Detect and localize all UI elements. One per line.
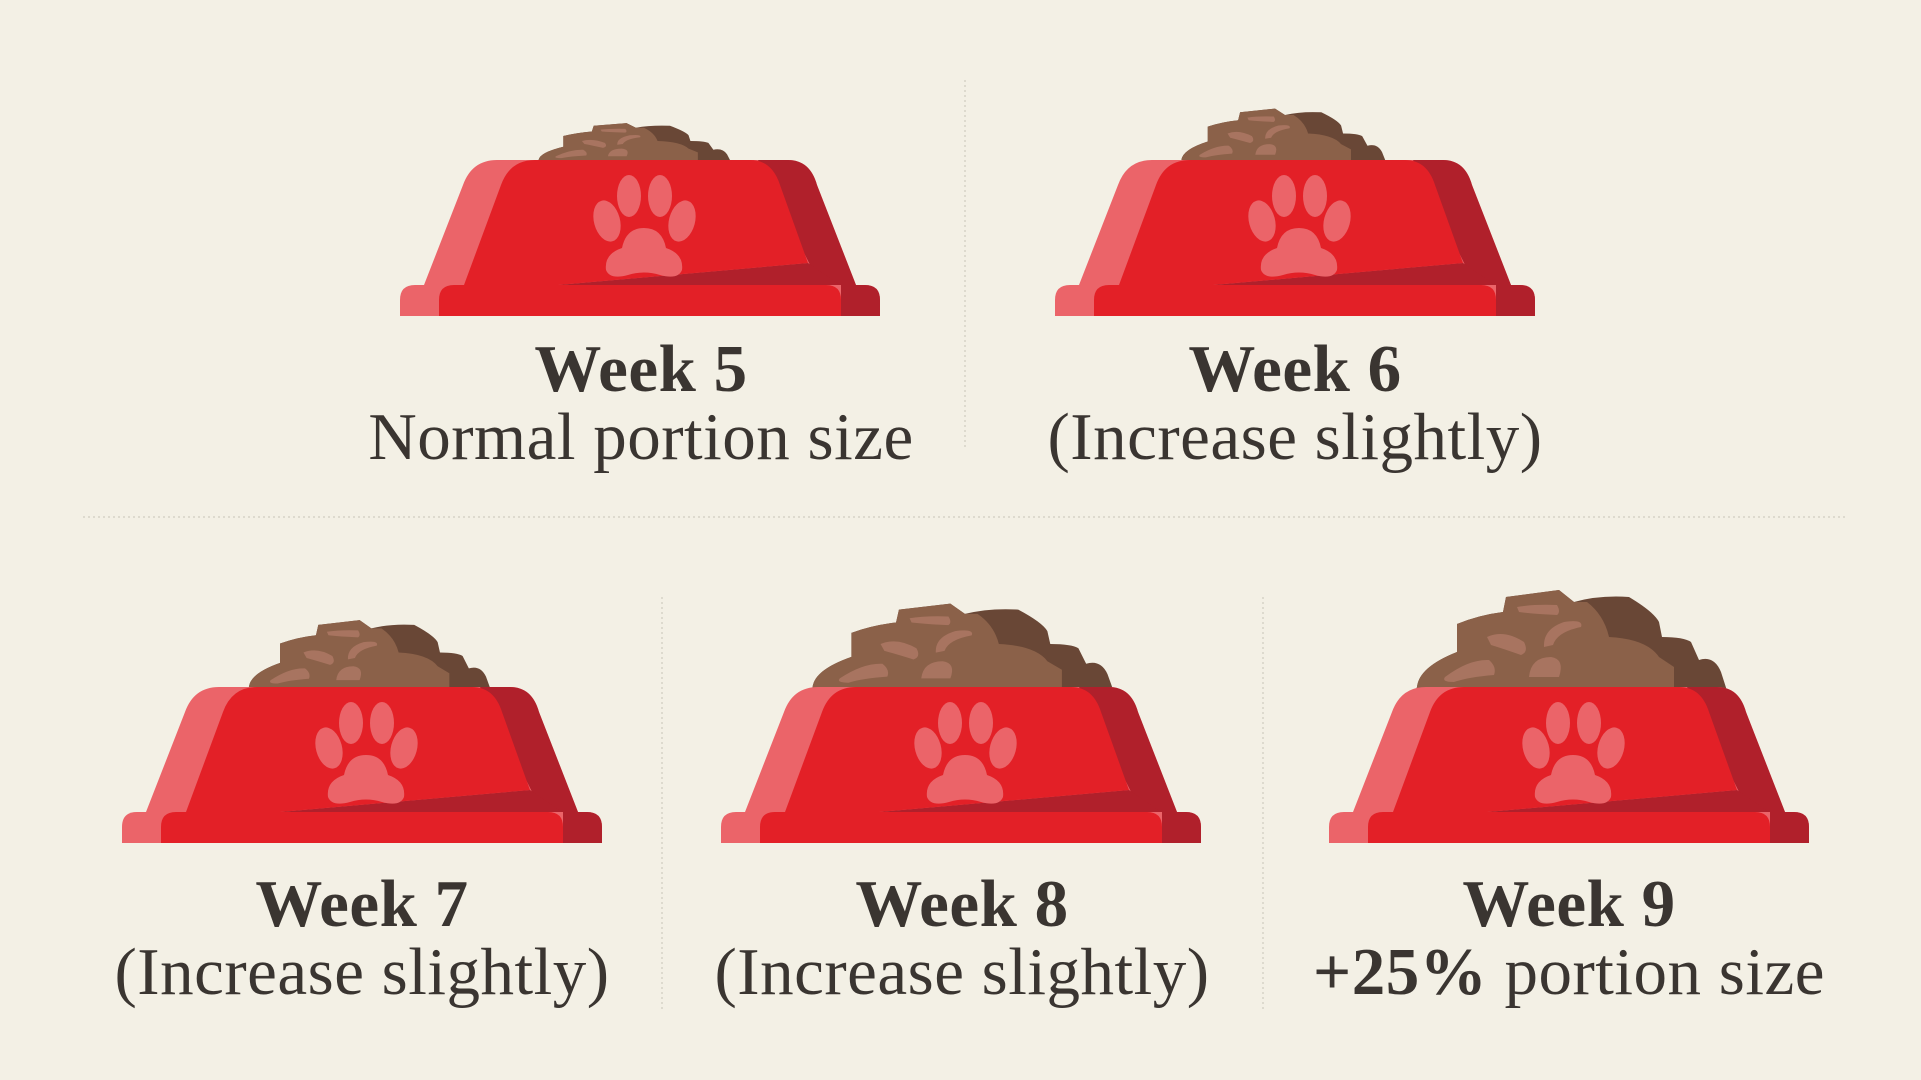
label: week 8: Week 8 [855,867,1069,941]
label: week 7: Week 7 [255,867,469,941]
label: week 8 [714,867,1210,1009]
label: week 6: (Increase slightly) [1047,400,1543,474]
label: week 6: Week 6 [1188,332,1402,406]
label: week 9 [1313,867,1825,1009]
label: week 5: Normal portion size [368,400,914,474]
label: week 5 [368,332,914,474]
label: week 8: (Increase slightly) [714,935,1210,1009]
label: week 7: (Increase slightly) [114,935,610,1009]
divider lines [83,80,1846,1011]
label: week 9: +25% portion size [1313,935,1825,1009]
bowl: week 5 [400,123,880,316]
bowl: week 6 [1055,109,1535,316]
label: week 9: Week 9 [1462,867,1676,941]
label: week 5: Week 5 [534,332,748,406]
bowl: week 9 [1329,590,1809,843]
label: week 7 [114,867,610,1009]
bowl: week 8 [721,604,1201,843]
label: week 6 [1047,332,1543,474]
bowl: week 7 [122,620,602,843]
